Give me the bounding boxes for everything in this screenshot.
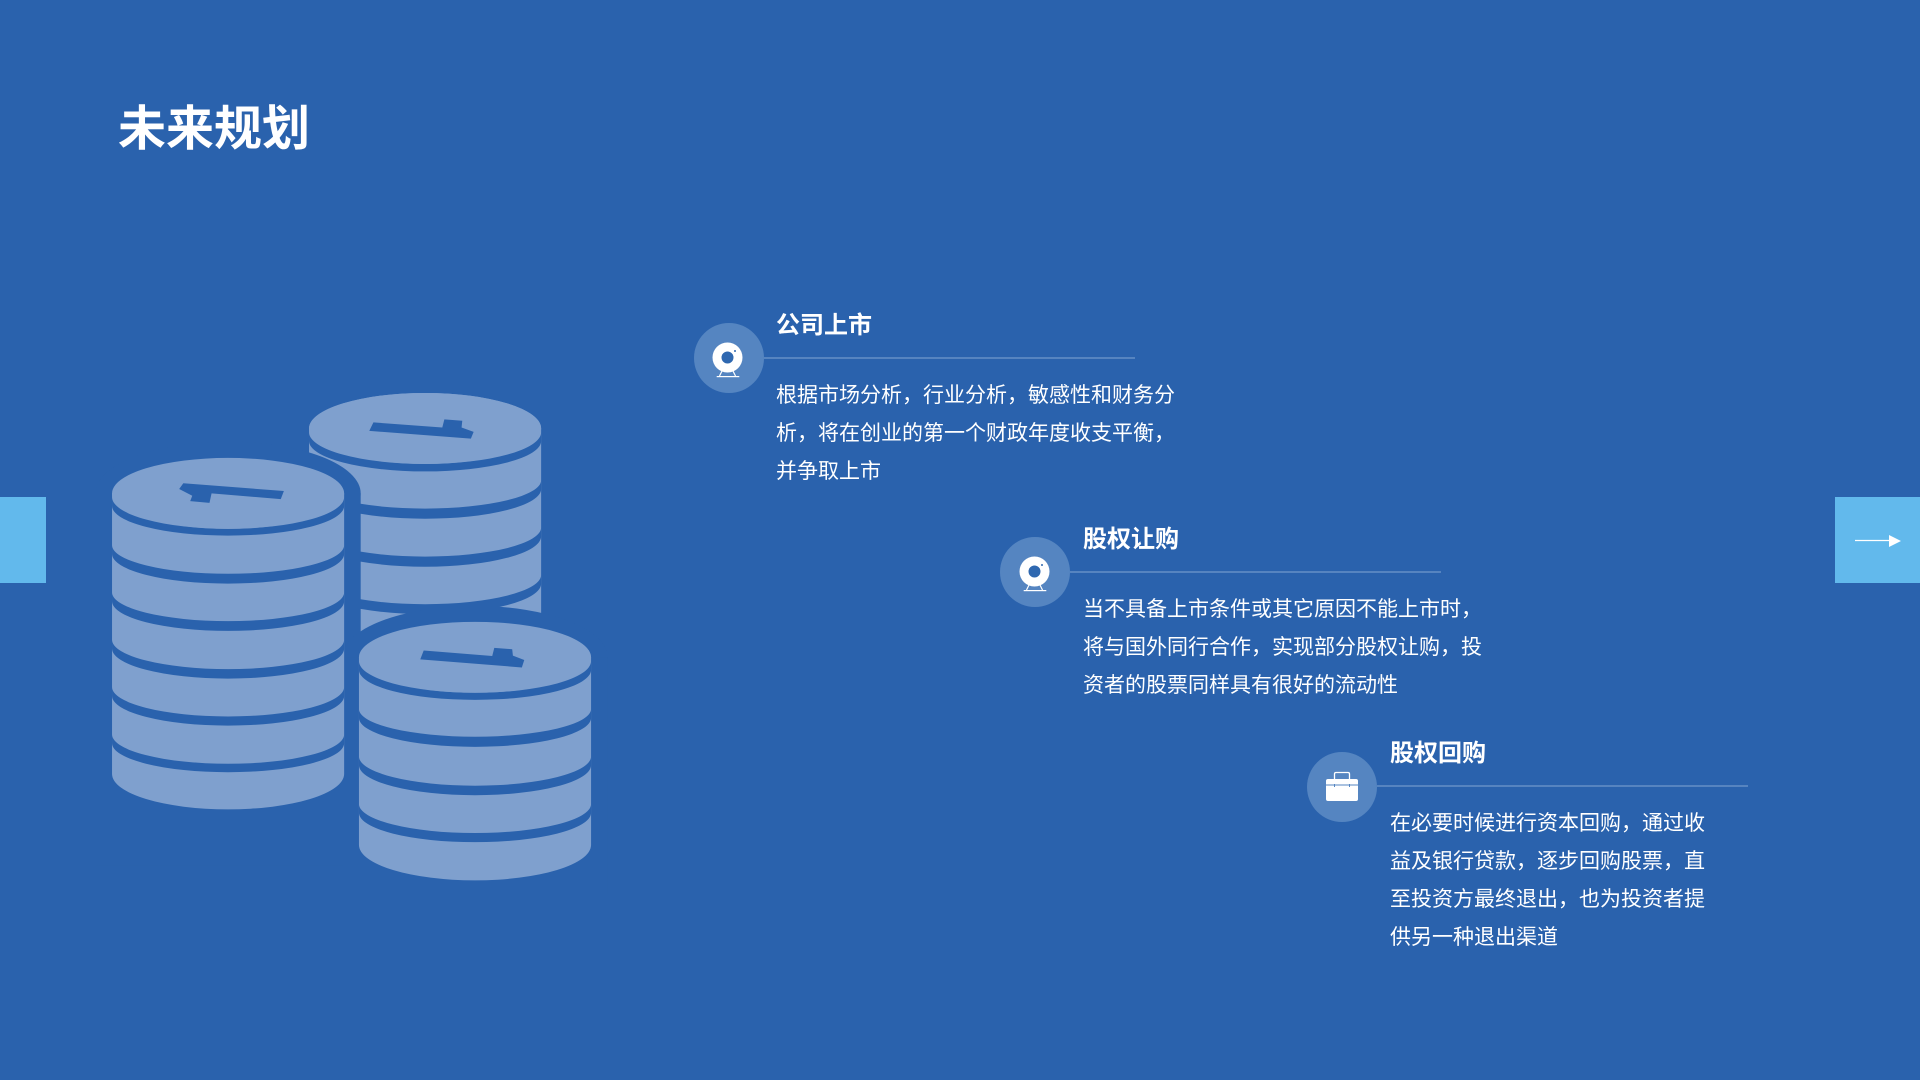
icon: webcam xyxy=(694,323,764,393)
back coin stack xyxy=(95,393,608,894)
text block: 益及银行贷款，逐步回购股票，直 xyxy=(1390,850,1705,873)
heading: 股权让购 xyxy=(1083,526,1179,553)
right side tab with arrow xyxy=(1835,497,1920,583)
icon: arrow xyxy=(1855,535,1901,547)
illustration: coin stacks xyxy=(112,393,592,880)
text block: 在必要时候进行资本回购，通过收 xyxy=(1390,812,1705,835)
heading: 公司上市 xyxy=(776,312,872,339)
panel: 股权让购 xyxy=(1000,526,1482,697)
icon: briefcase xyxy=(1307,752,1377,822)
text block: 资者的股票同样具有很好的流动性 xyxy=(1083,674,1398,697)
heading: 股权回购 xyxy=(1390,740,1486,767)
text block: 供另一种退出渠道 xyxy=(1390,926,1558,949)
text block: 将与国外同行合作，实现部分股权让购，投 xyxy=(1083,636,1482,659)
text block: 并争取上市 xyxy=(776,460,881,483)
panel: 公司上市 xyxy=(694,312,1175,483)
text block xyxy=(1390,812,1705,949)
left coin stack xyxy=(112,458,344,809)
divider line xyxy=(764,357,1135,359)
divider line xyxy=(1377,785,1748,787)
icon: webcam xyxy=(1000,537,1070,607)
title: 未来规划 xyxy=(118,103,310,156)
panel: 股权回购 xyxy=(1307,740,1748,949)
text block xyxy=(776,384,1175,483)
divider line xyxy=(1070,571,1441,573)
text block: 根据市场分析，行业分析，敏感性和财务分 xyxy=(776,384,1175,407)
left side tab xyxy=(0,497,46,583)
text block xyxy=(1083,598,1482,697)
text block: 析，将在创业的第一个财政年度收支平衡， xyxy=(776,422,1175,445)
text block: 当不具备上市条件或其它原因不能上市时， xyxy=(1083,598,1482,621)
front coin stack xyxy=(359,622,591,880)
text block: 至投资方最终退出，也为投资者提 xyxy=(1390,888,1705,911)
